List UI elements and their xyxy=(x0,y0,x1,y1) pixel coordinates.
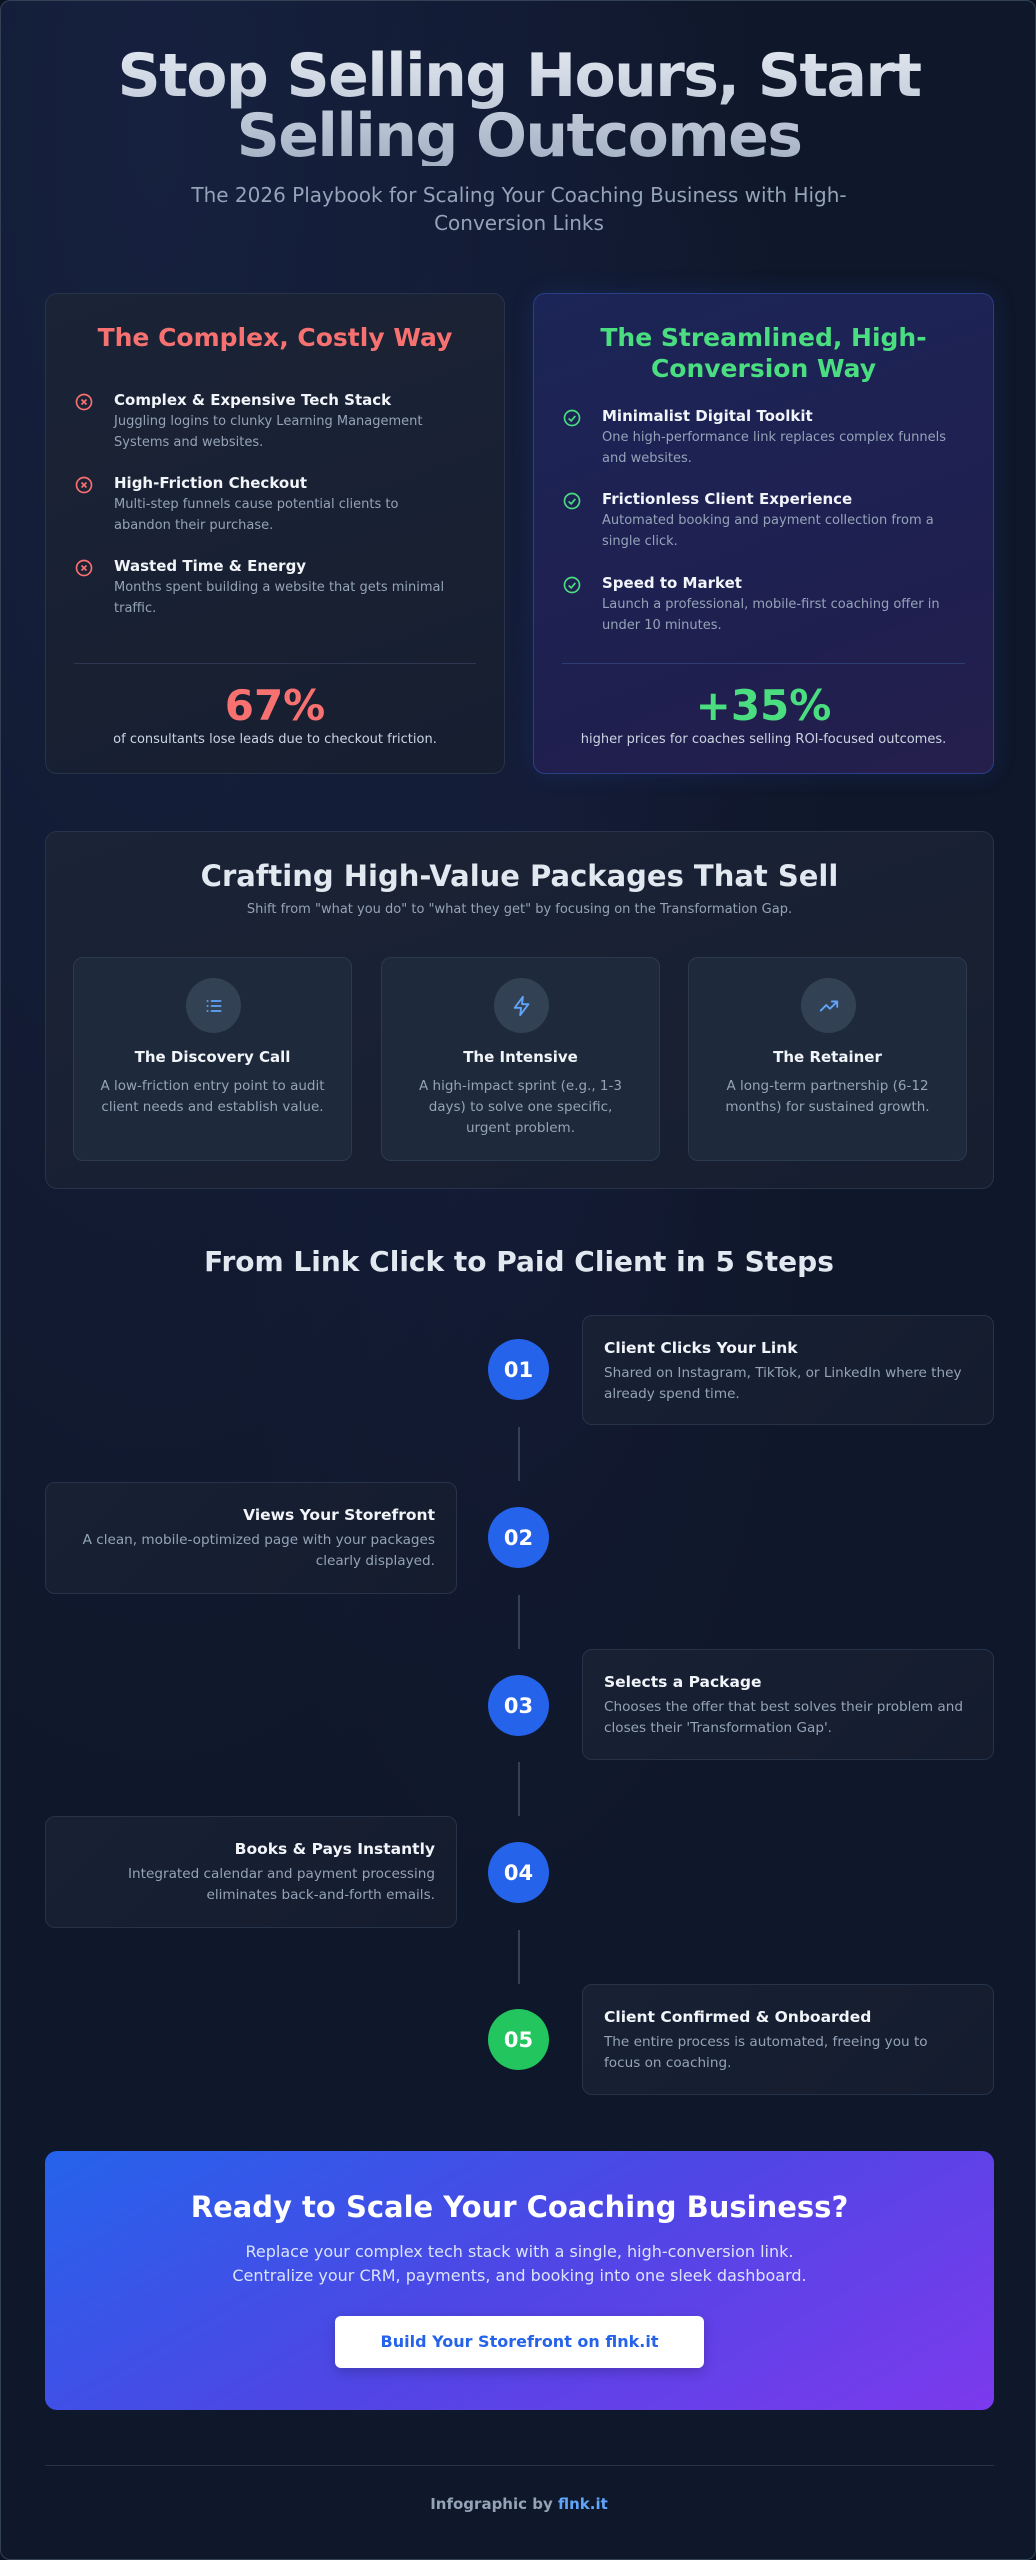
CTA text: Replace your complex tech stack with a single, high-conversion link. xyxy=(246,2242,793,2261)
item: tech stack: Complex & Expensive Tech Stack xyxy=(114,391,391,409)
stat: +35%: +35% xyxy=(696,681,831,730)
heading: streamlined way: The Streamlined, High- xyxy=(600,323,927,352)
card: discovery call: client needs and establish value. xyxy=(101,1099,324,1115)
timeline xyxy=(45,1315,994,2095)
item: wasted time: Wasted Time & Energy xyxy=(114,557,306,575)
step 4 card xyxy=(45,1816,457,1928)
heading: packages: Crafting High-Value Packages That Sell xyxy=(201,859,838,893)
step 5 circle: 05 xyxy=(504,2028,533,2052)
step 4 circle: 04 xyxy=(504,1860,533,1884)
card: intensive: The Intensive xyxy=(463,1048,578,1066)
stat: 67% xyxy=(113,681,437,747)
item: wasted time: Months spent building a website that gets minimal traffic. xyxy=(114,580,444,616)
heading: streamlined way: Conversion Way xyxy=(651,354,876,383)
card: discovery call: A low-friction entry point to audit xyxy=(100,1078,325,1094)
subtitle: Conversion Links xyxy=(434,211,604,235)
heading: streamlined way xyxy=(600,323,927,383)
step 1 circle: 01 xyxy=(504,1358,533,1382)
panel: streamlined way xyxy=(533,293,994,774)
stat: +35%: higher prices for coaches selling ROI-focused outcomes. xyxy=(581,732,946,747)
title xyxy=(1,46,1036,166)
CTA button xyxy=(335,2316,704,2368)
step 1 card: Client Clicks Your Link xyxy=(604,1339,798,1357)
card: intensive xyxy=(381,957,660,1161)
icon: trending up xyxy=(801,978,856,1033)
card: retainer: A long-term partnership (6-12 xyxy=(726,1078,929,1094)
item: tech stack: Juggling logins to clunky Learning Management Systems and websites. xyxy=(114,414,423,450)
card: discovery call xyxy=(73,957,352,1161)
item: speed xyxy=(564,574,940,632)
panel: packages xyxy=(45,831,994,1189)
step 5 card: The entire process is automated, freeing you to xyxy=(604,2034,928,2050)
title: Selling Outcomes xyxy=(237,101,801,171)
step 1 card: Shared on Instagram, TikTok, or LinkedIn where they already spend time. xyxy=(604,1365,962,1402)
item: frictionless xyxy=(564,490,934,548)
card: retainer: The Retainer xyxy=(773,1048,882,1066)
subtitle xyxy=(191,183,847,235)
card: retainer: months) for sustained growth. xyxy=(725,1099,930,1115)
item: toolkit: One high-performance link replaces complex funnels and websites. xyxy=(602,430,946,466)
card: intensive: A high-impact sprint (e.g., 1-3 xyxy=(419,1078,622,1094)
step 4 card: Books & Pays Instantly xyxy=(235,1840,435,1858)
item: checkout: Multi-step funnels cause potential clients to abandon their purchase. xyxy=(114,497,398,532)
step 5 card xyxy=(582,1984,994,2095)
step 2 circle: 02 xyxy=(504,1526,533,1550)
card: intensive: days) to solve one specific, xyxy=(429,1099,612,1115)
step 2 card: A clean, mobile-optimized page with your packages clearly displayed. xyxy=(83,1532,435,1568)
CTA panel xyxy=(45,2151,994,2410)
step 1 circle xyxy=(488,1339,549,1400)
step 5 circle xyxy=(488,2009,549,2070)
stat: 67%: of consultants lose leads due to checkout friction. xyxy=(113,732,437,747)
footer: Infographic by flnk.it xyxy=(430,2495,608,2513)
item: frictionless: Frictionless Client Experience xyxy=(602,490,852,508)
icon: list xyxy=(186,978,241,1033)
step 3 card xyxy=(582,1649,994,1760)
CTA text: Centralize your CRM, payments, and booking into one sleek dashboard. xyxy=(232,2266,807,2285)
step 2 circle xyxy=(488,1507,549,1568)
step 3 circle: 03 xyxy=(504,1694,533,1718)
card: intensive: urgent problem. xyxy=(466,1120,575,1136)
panel: complex costly way xyxy=(45,293,505,774)
item: speed: Speed to Market xyxy=(602,574,742,592)
step 4 card: eliminates back-and-forth emails. xyxy=(206,1886,435,1902)
item: checkout xyxy=(76,474,398,532)
heading: 5 steps: From Link Click to Paid Client in 5 Steps xyxy=(204,1245,834,1278)
item: frictionless: Automated booking and payment collection from a single click. xyxy=(602,513,934,548)
card: discovery call: The Discovery Call xyxy=(135,1048,290,1066)
CTA text xyxy=(232,2242,807,2285)
item: tech stack xyxy=(76,391,423,450)
item: speed: Launch a professional, mobile-first coaching offer in under 10 minutes. xyxy=(602,597,940,632)
title: Stop Selling Hours, Start xyxy=(118,41,920,111)
subheading: Shift from "what you do" to "what they get" by focusing on the Transformation Gap. xyxy=(247,902,792,917)
step 4 card: Integrated calendar and payment processing xyxy=(128,1866,435,1882)
icon: zap xyxy=(494,978,549,1033)
item: toolkit: Minimalist Digital Toolkit xyxy=(602,407,813,425)
item: toolkit xyxy=(564,407,946,466)
item: wasted time xyxy=(76,557,444,616)
stat: +35% xyxy=(581,681,946,747)
stat: 67%: 67% xyxy=(225,681,325,730)
CTA button: Build Your Storefront on flnk.it xyxy=(381,2332,658,2351)
step 3 card: Chooses the offer that best solves their problem and closes their 'Transformation Gap'. xyxy=(604,1699,963,1736)
step 2 card: Views Your Storefront xyxy=(243,1506,435,1524)
item: checkout: High-Friction Checkout xyxy=(114,474,307,492)
step 5 card: Client Confirmed & Onboarded xyxy=(604,2008,871,2026)
step 3 card: Selects a Package xyxy=(604,1673,762,1691)
step 5 card: focus on coaching. xyxy=(604,2054,731,2070)
CTA heading: Ready to Scale Your Coaching Business? xyxy=(191,2190,848,2224)
heading: complex way: The Complex, Costly Way xyxy=(98,323,452,352)
subtitle: The 2026 Playbook for Scaling Your Coaching Business with High- xyxy=(191,183,847,207)
step 3 circle xyxy=(488,1675,549,1736)
step 2 card xyxy=(45,1482,457,1594)
card: retainer xyxy=(688,957,967,1161)
step 1 card xyxy=(582,1315,994,1425)
step 4 circle xyxy=(488,1842,549,1903)
